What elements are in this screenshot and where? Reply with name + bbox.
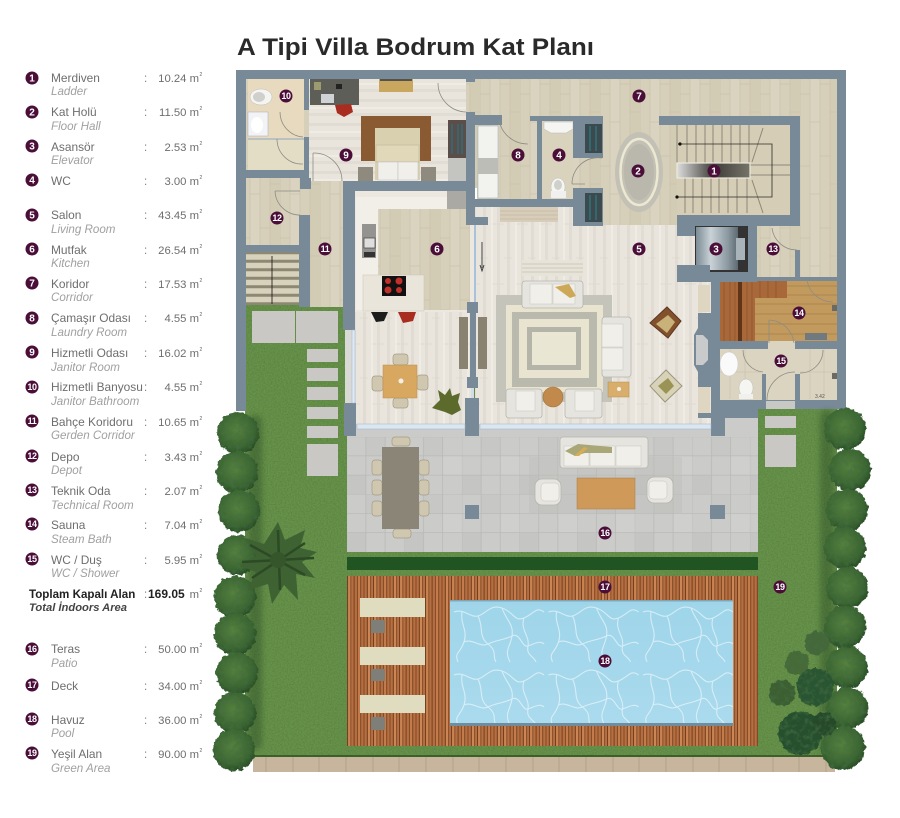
marker 1 — [708, 164, 720, 178]
marker 12: 12 — [272, 213, 282, 223]
legend row 3: 3 — [29, 142, 35, 152]
marker 15: 15 — [776, 356, 786, 366]
sauna floor — [720, 281, 838, 341]
legend row 8: : — [144, 313, 147, 325]
legend row 17: 17 — [27, 680, 37, 690]
legend row 3: Asansör — [51, 140, 95, 154]
legend row 8: 8 — [29, 314, 35, 324]
marker 7: 7 — [636, 92, 642, 102]
legend row 18: 18 — [27, 714, 37, 724]
legend row 3 — [26, 140, 202, 167]
legend row 9: 16.02 m — [158, 348, 199, 360]
marker 11: 11 — [321, 244, 330, 254]
legend row 1: 10.24 m — [158, 73, 199, 85]
marker 17: 17 — [600, 582, 610, 592]
marker 10: 10 — [281, 91, 291, 101]
oval hall rug — [615, 132, 663, 212]
legend row 4: WC — [51, 174, 71, 188]
legend row 17: : — [144, 681, 147, 693]
legend row 9: Hizmetli Odası — [51, 346, 128, 360]
legend row 11: 11 — [28, 416, 37, 426]
marker 14 — [792, 306, 806, 320]
legend row 15: 2 — [200, 554, 202, 560]
legend total: 169.05 — [148, 587, 185, 601]
legend row 10: 10 — [27, 382, 37, 392]
marker 16 — [598, 526, 612, 540]
legend row 7 — [26, 276, 202, 304]
legend row 12 — [26, 450, 202, 477]
legend row 4: 4 — [29, 176, 35, 186]
marker 9: 9 — [343, 150, 349, 162]
legend row 6: Kitchen — [51, 257, 90, 270]
legend row 18: Pool — [51, 727, 75, 740]
legend row 2: 11.50 m — [159, 107, 199, 119]
legend row 14 — [26, 518, 202, 546]
marker 2: 2 — [635, 166, 641, 178]
marker 19: 19 — [775, 582, 785, 592]
hedge strip — [347, 557, 758, 570]
marker 5: 5 — [636, 244, 642, 256]
marker 3: 3 — [713, 244, 719, 256]
outdoor dining set — [372, 437, 429, 538]
legend row 12: Depot — [51, 464, 83, 477]
marker 1: 1 — [711, 166, 717, 178]
marker 2 — [632, 164, 644, 178]
legend row 3: : — [144, 142, 147, 154]
marker 5 — [632, 242, 646, 256]
legend row 15: 5.95 m — [164, 555, 199, 567]
outdoor armchairs — [535, 477, 673, 505]
furniture: janitor room — [310, 78, 466, 181]
elevator — [695, 225, 748, 272]
hedge shadow — [248, 410, 834, 755]
marker 13 — [766, 242, 780, 256]
marker 9 — [340, 148, 352, 162]
legend row 15: WC / Shower — [51, 567, 120, 580]
panel: terrace — [347, 418, 758, 552]
legend row 13: Technical Room — [51, 499, 134, 512]
legend row 16: Teras — [51, 642, 80, 656]
legend row 19: 90.00 m — [158, 749, 199, 761]
ground floor slabs — [245, 78, 838, 424]
legend row 7: 2 — [200, 278, 202, 284]
legend row 11 — [26, 414, 202, 442]
legend row 1 — [26, 71, 202, 98]
marker 3 — [710, 242, 722, 256]
legend row 9: 9 — [29, 348, 35, 358]
palms and shrubs right — [769, 631, 836, 755]
legend row 13: 2.07 m — [164, 486, 199, 498]
legend row 2: 2 — [200, 106, 202, 112]
arrow in living room — [480, 242, 484, 271]
legend row 10: 2 — [200, 381, 202, 387]
marker 6: 6 — [434, 244, 440, 256]
marker 16: 16 — [600, 528, 610, 538]
legend row 6: : — [144, 245, 147, 257]
marker 15 — [774, 354, 788, 368]
room 9 floor — [309, 78, 466, 181]
legend row 19: 19 — [27, 748, 37, 758]
legend row 16: : — [144, 644, 147, 656]
fixtures: sauna and wc shower: 3.42 — [815, 394, 825, 400]
legend row 10: Hizmetli Banyosu — [51, 380, 143, 394]
strips by fireplace — [698, 285, 710, 414]
wc shower floor — [720, 341, 838, 400]
legend row 4: 2 — [200, 175, 202, 181]
legend row 14: Sauna — [51, 518, 86, 532]
threshold — [766, 401, 795, 409]
legend total: Total İndoors Area — [29, 601, 127, 614]
marker 8 — [512, 148, 524, 162]
legend row 16: 16 — [27, 644, 37, 654]
legend row 3: 2 — [200, 141, 202, 147]
legend row 15: WC / Duş — [51, 553, 102, 567]
legend row 7: : — [144, 279, 147, 291]
marker 4: 4 — [556, 150, 562, 162]
legend row 7: 17.53 m — [158, 279, 199, 291]
legend row 16: Patio — [51, 657, 78, 670]
legend row 14: 7.04 m — [164, 520, 199, 532]
staircase — [675, 125, 790, 215]
walls — [236, 70, 846, 436]
legend row 17: Deck — [51, 679, 78, 693]
legend row 12: : — [144, 452, 147, 464]
wall benches — [459, 317, 487, 369]
legend row 19: : — [144, 749, 147, 761]
door swings — [275, 83, 833, 400]
legend row 17 — [26, 678, 202, 693]
legend row 11: 2 — [200, 416, 202, 422]
windows — [345, 225, 711, 429]
kitchen counters — [356, 191, 468, 323]
legend row 5 — [26, 208, 202, 236]
legend row 14: Steam Bath — [51, 533, 112, 546]
legend row 4: 3.00 m — [164, 176, 199, 188]
legend row 5: Living Room — [51, 223, 116, 236]
marker 6 — [430, 242, 444, 256]
legend row 5: : — [144, 210, 147, 222]
legend row 11: Bahçe Koridoru — [51, 415, 133, 429]
legend row 10: : — [144, 382, 147, 394]
legend row 2: Floor Hall — [51, 120, 101, 133]
legend row 18 — [26, 712, 202, 740]
outdoor sofa — [560, 437, 648, 468]
kitchen floor — [355, 191, 475, 424]
fixtures: wc 4 — [544, 122, 573, 198]
marker 8: 8 — [515, 150, 521, 162]
legend row 12: Depo — [51, 450, 80, 464]
legend row 18: Havuz — [51, 713, 85, 727]
hall corner floor — [677, 226, 698, 286]
legend row 2: Kat Holü — [51, 105, 97, 119]
legend row 12: 3.43 m — [164, 452, 199, 464]
panel: pool deck — [347, 576, 758, 746]
marker 7 — [632, 90, 646, 102]
room 8 floor — [477, 125, 537, 199]
legend row 16: 50.00 m — [158, 644, 199, 656]
legend row 19: 2 — [200, 748, 202, 754]
legend row 8: Laundry Room — [51, 326, 127, 339]
outdoor coffee table — [577, 478, 635, 509]
legend row 10: Janitor Bathroom — [50, 395, 140, 408]
legend row 13: 13 — [27, 485, 37, 495]
legend total: 2 — [200, 588, 202, 594]
legend row 11: : — [144, 417, 147, 429]
legend row 11: Gerden Corridor — [51, 429, 136, 442]
legend row 2 — [26, 105, 202, 133]
left hedge — [213, 412, 260, 771]
legend row 6: Mutfak — [51, 243, 87, 257]
marker 11 — [318, 242, 332, 256]
room 12 floor — [246, 178, 310, 246]
room 11 floor — [309, 181, 343, 307]
side table — [608, 382, 629, 397]
legend row 17: 2 — [200, 680, 202, 686]
legend row 7: Koridor — [51, 277, 89, 291]
legend total: m — [190, 589, 199, 601]
legend row 16 — [26, 642, 202, 670]
marker 12 — [270, 212, 284, 224]
legend row 19: Yeşil Alan — [51, 747, 102, 761]
panel: garden lawn — [245, 305, 837, 757]
legend row 2: : — [144, 107, 147, 119]
legend row 10 — [26, 380, 202, 408]
tv shelf — [522, 260, 583, 276]
legend total — [29, 587, 202, 614]
legend row 17: 34.00 m — [158, 681, 199, 693]
legend row 1: Merdiven — [51, 71, 100, 85]
panel: area legend — [26, 71, 202, 775]
salon floor — [475, 207, 711, 424]
round table — [543, 387, 563, 407]
legend row 19 — [26, 746, 202, 775]
legend row 5: 2 — [200, 209, 202, 215]
indoor plant — [432, 388, 461, 415]
legend row 15 — [26, 552, 202, 580]
room number markers — [270, 90, 806, 668]
marker 17 — [598, 580, 612, 594]
tv unit — [500, 207, 558, 222]
legend row 14: 2 — [200, 519, 202, 525]
dining set — [372, 354, 428, 408]
legend row 10: 4.55 m — [164, 382, 199, 394]
paver strip — [253, 757, 835, 772]
sun loungers — [360, 598, 425, 730]
legend row 9: : — [144, 348, 147, 360]
legend row 2: 2 — [29, 108, 35, 118]
legend row 7: Corridor — [51, 291, 94, 304]
legend row 13: : — [144, 486, 147, 498]
legend row 1: : — [144, 73, 147, 85]
legend row 13: 2 — [200, 485, 202, 491]
legend row 1: 1 — [29, 74, 35, 84]
legend row 6: 6 — [29, 244, 35, 256]
legend row 18: 2 — [200, 714, 202, 720]
legend total: : — [144, 589, 147, 601]
legend row 13 — [26, 484, 202, 512]
cream armchair — [650, 370, 682, 402]
legend row 6 — [26, 242, 202, 270]
legend row 15: : — [144, 555, 147, 567]
marker 18 — [598, 654, 612, 668]
legend row 14: 14 — [27, 519, 37, 529]
legend row 9 — [26, 346, 202, 374]
legend row 9: Janitor Room — [50, 361, 120, 374]
right sofa — [602, 317, 631, 377]
legend row 12: 2 — [200, 451, 202, 457]
closets — [573, 116, 603, 226]
outdoor stairs — [245, 252, 299, 305]
legend row 4 — [26, 174, 202, 188]
legend row 8: 4.55 m — [164, 313, 199, 325]
legend row 12: 12 — [27, 451, 37, 461]
legend row 4: : — [144, 176, 147, 188]
legend row 8: 2 — [200, 312, 202, 318]
legend row 5: 5 — [29, 210, 35, 222]
legend row 13: Teknik Oda — [51, 484, 111, 498]
room 4 floor — [542, 121, 573, 199]
marker 19 — [774, 580, 786, 594]
living room rug — [496, 295, 612, 402]
brown armchair — [650, 307, 681, 338]
title: A Tipi Villa Bodrum Kat Planı — [237, 34, 594, 61]
legend row 11: 10.65 m — [158, 417, 199, 429]
legend row 3: Elevator — [51, 154, 95, 167]
legend row 6: 2 — [200, 244, 202, 250]
legend row 15: 15 — [27, 554, 37, 564]
terrace columns — [465, 505, 725, 519]
legend total: Toplam Kapalı Alan — [29, 588, 135, 601]
top sofa — [522, 281, 583, 308]
marker 10 — [280, 90, 292, 102]
fixtures: laundry room — [478, 126, 498, 198]
legend row 8: Çamaşır Odası — [51, 311, 131, 325]
legend row 16: 2 — [200, 643, 202, 649]
legend row 1: 2 — [200, 72, 202, 78]
legend row 18: : — [144, 715, 147, 727]
legend row 8 — [26, 311, 202, 339]
legend row 18: 36.00 m — [158, 715, 199, 727]
legend row 7: 7 — [29, 278, 35, 290]
legend row 19: Green Area — [51, 762, 111, 775]
fixtures: sauna and wc shower — [720, 305, 837, 400]
right hedge — [821, 408, 871, 770]
bottom armchairs — [506, 389, 602, 418]
legend row 1: Ladder — [51, 85, 88, 98]
marker 4 — [552, 148, 566, 162]
stepping stones — [252, 311, 796, 476]
legend row 5: Salon — [51, 208, 81, 222]
fixtures: janitor bathroom — [248, 89, 272, 136]
marker 18: 18 — [600, 656, 610, 666]
legend row 14: : — [144, 520, 147, 532]
legend row 9: 2 — [200, 347, 202, 353]
marker 13: 13 — [768, 244, 778, 254]
legend row 6: 26.54 m — [158, 245, 199, 257]
living room furniture — [506, 260, 682, 418]
pool water — [450, 600, 733, 726]
room 13 floor — [757, 225, 800, 277]
room 10 floor — [248, 79, 304, 170]
palm tree left — [240, 522, 317, 604]
legend row 3: 2.53 m — [164, 142, 199, 154]
legend row 5: 43.45 m — [158, 210, 199, 222]
fireplace inset — [696, 335, 708, 365]
marker 14: 14 — [794, 308, 804, 318]
